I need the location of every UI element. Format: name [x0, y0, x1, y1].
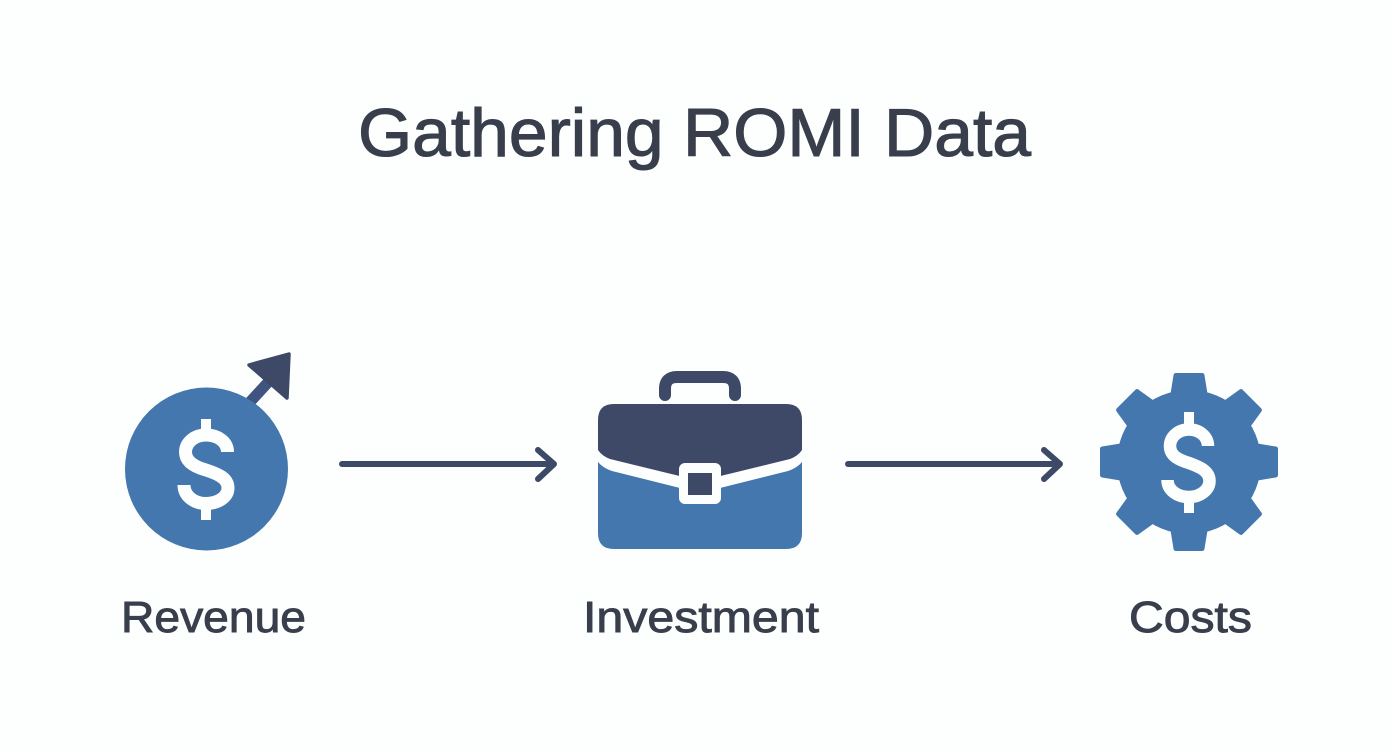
step: investment	[583, 377, 819, 642]
icon: gear with dollar sign	[1102, 376, 1276, 548]
label: investment: Investment	[583, 593, 819, 642]
icon: dollar coin with rising arrow	[125, 354, 289, 550]
arrow: investment to costs	[848, 450, 1060, 479]
arrow: revenue to investment	[342, 450, 554, 479]
label: revenue: Revenue	[121, 593, 306, 642]
label: costs: Costs	[1129, 593, 1252, 642]
step: costs	[1102, 376, 1276, 642]
title: Gathering ROMI Data	[358, 95, 1031, 171]
icon: briefcase	[598, 377, 802, 549]
step: revenue	[121, 354, 306, 642]
